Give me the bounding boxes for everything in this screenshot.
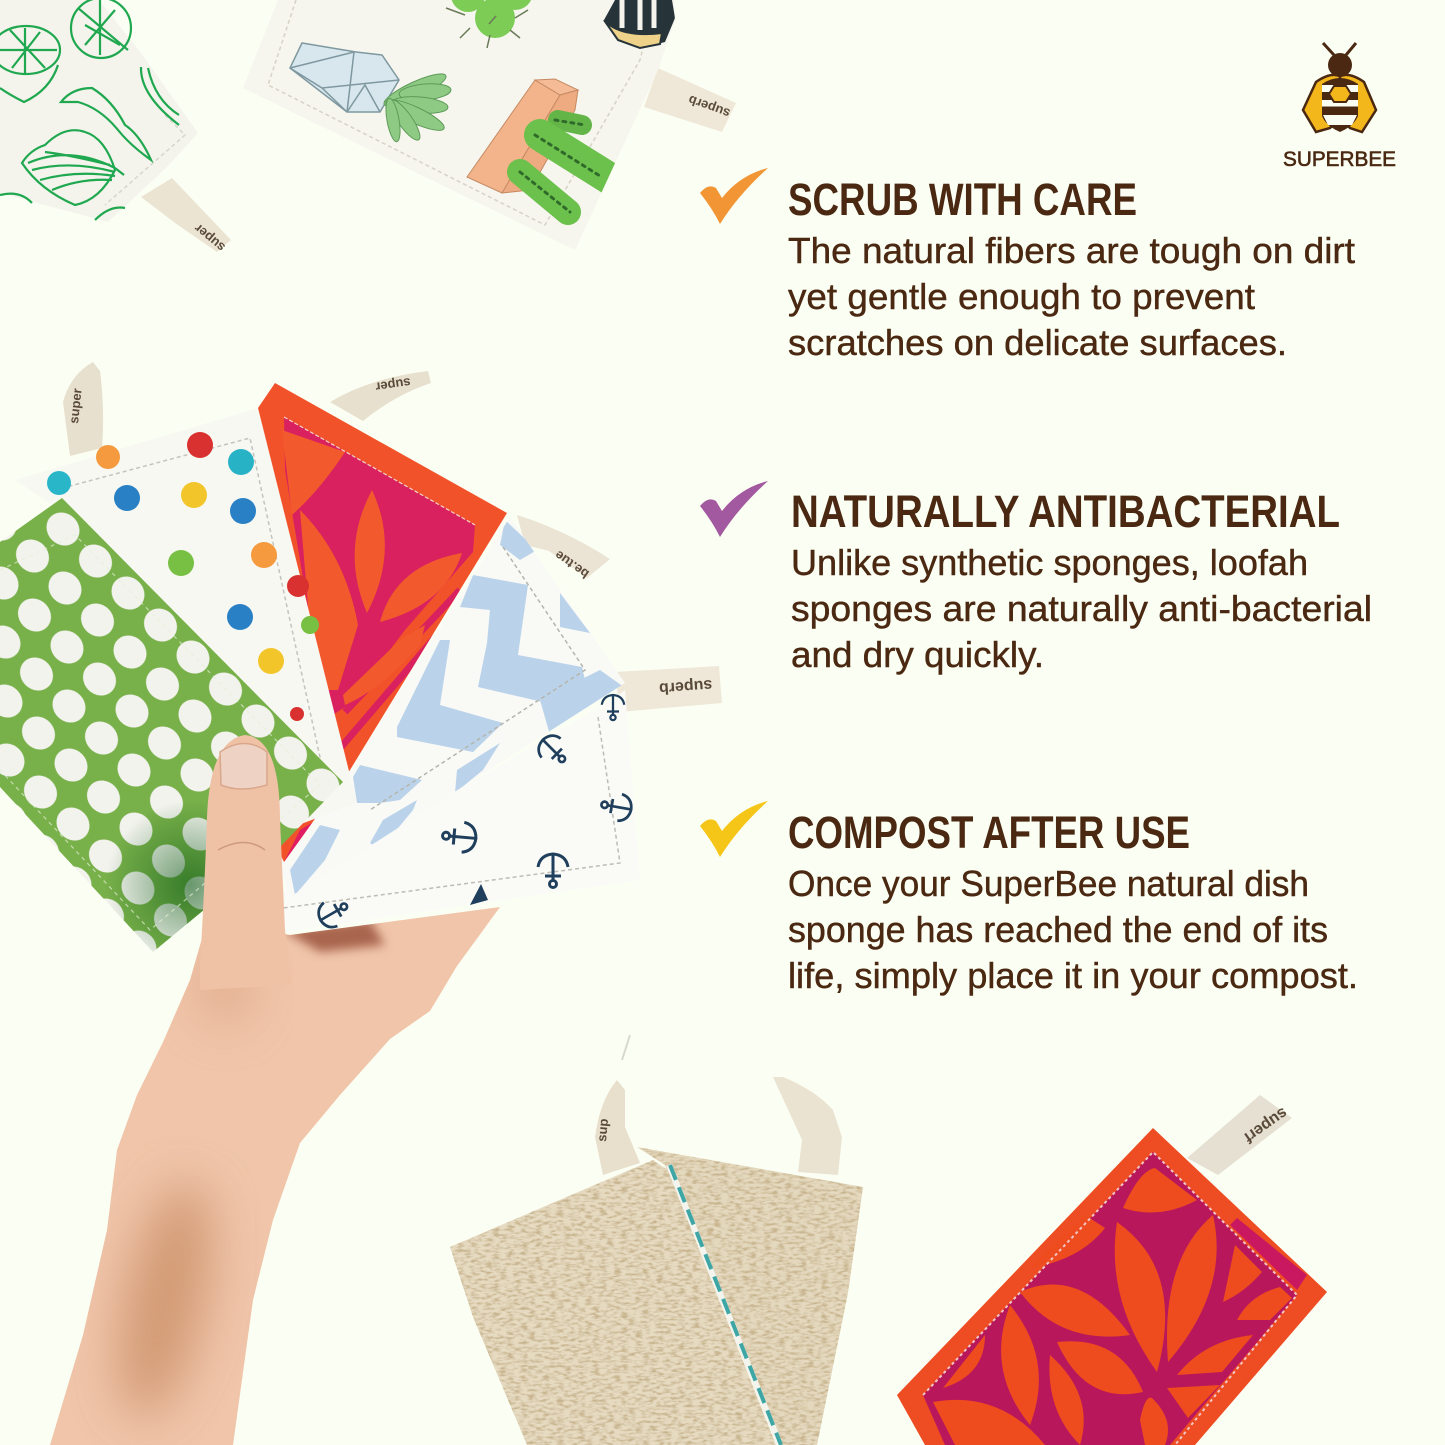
body text: yet gentle enough to prevent xyxy=(788,276,1255,317)
photo: loofah sponges, bottom centre xyxy=(450,1035,863,1445)
green polka dot sponge xyxy=(0,498,343,970)
body text: Unlike synthetic sponges, loofah xyxy=(791,542,1308,583)
body text: sponge has reached the end of its xyxy=(788,909,1328,950)
heading: NATURALLY ANTIBACTERIAL xyxy=(791,486,1340,537)
succulent xyxy=(384,73,452,142)
hanging tags: be.tue xyxy=(552,548,592,582)
hanging tags: super xyxy=(375,375,412,395)
heading: SCRUB WITH CARE xyxy=(788,174,1137,225)
icon: yellow check xyxy=(700,801,768,857)
body text: life, simply place it in your compost. xyxy=(788,955,1358,996)
logo wordmark: SUPERBEE xyxy=(1283,148,1396,171)
body text xyxy=(788,230,1355,363)
heading: COMPOST AFTER USE xyxy=(788,807,1190,858)
chevron print sponge xyxy=(278,517,628,897)
photo: sponge with vegetable print, top left xyxy=(0,0,231,255)
body text xyxy=(791,542,1372,675)
sponge fan xyxy=(0,362,722,970)
photo: red leaf sponge, bottom right: superf xyxy=(1240,1104,1290,1146)
icon: bee xyxy=(1303,43,1376,132)
benefit: scrub with care xyxy=(700,168,1355,363)
red leaf print sponge xyxy=(258,383,507,862)
photo: hand and arm holding sponges xyxy=(50,907,500,1445)
body text: and dry quickly. xyxy=(791,634,1044,675)
cacti xyxy=(520,120,612,212)
body text: sponges are naturally anti-bacterial xyxy=(791,588,1372,629)
striped pot xyxy=(604,0,675,47)
hanging tags xyxy=(63,362,722,712)
body text: Once your SuperBee natural dish xyxy=(788,863,1309,904)
icon: orange check xyxy=(700,168,768,224)
photo: red leaf sponge, bottom right xyxy=(897,1095,1327,1445)
anchor print sponge xyxy=(277,690,640,932)
photo: thumb over the sponges xyxy=(200,735,292,990)
photo: sponge with cactus print, top centre: superb xyxy=(686,92,732,121)
teal fabric edge xyxy=(669,1165,780,1445)
rainbow dot print sponge xyxy=(15,408,357,830)
body text: The natural fibers are tough on dirt xyxy=(788,230,1355,271)
crystal planter xyxy=(290,43,399,112)
hanging tags: superb xyxy=(658,676,713,697)
benefit: compost after use xyxy=(700,801,1358,996)
photo: loofah sponges, bottom centre: sup xyxy=(594,1118,611,1142)
body text xyxy=(788,863,1358,996)
peach pot xyxy=(467,79,578,193)
body text: scratches on delicate surfaces. xyxy=(788,322,1287,363)
benefit: naturally antibacterial xyxy=(700,481,1372,675)
hanging tags: super xyxy=(66,388,85,424)
photo: sponge with cactus print, top centre xyxy=(243,0,736,250)
photo: sponge with vegetable print, top left: super xyxy=(191,221,228,255)
icon: purple check xyxy=(700,481,768,537)
logo: superbee xyxy=(1283,43,1396,171)
